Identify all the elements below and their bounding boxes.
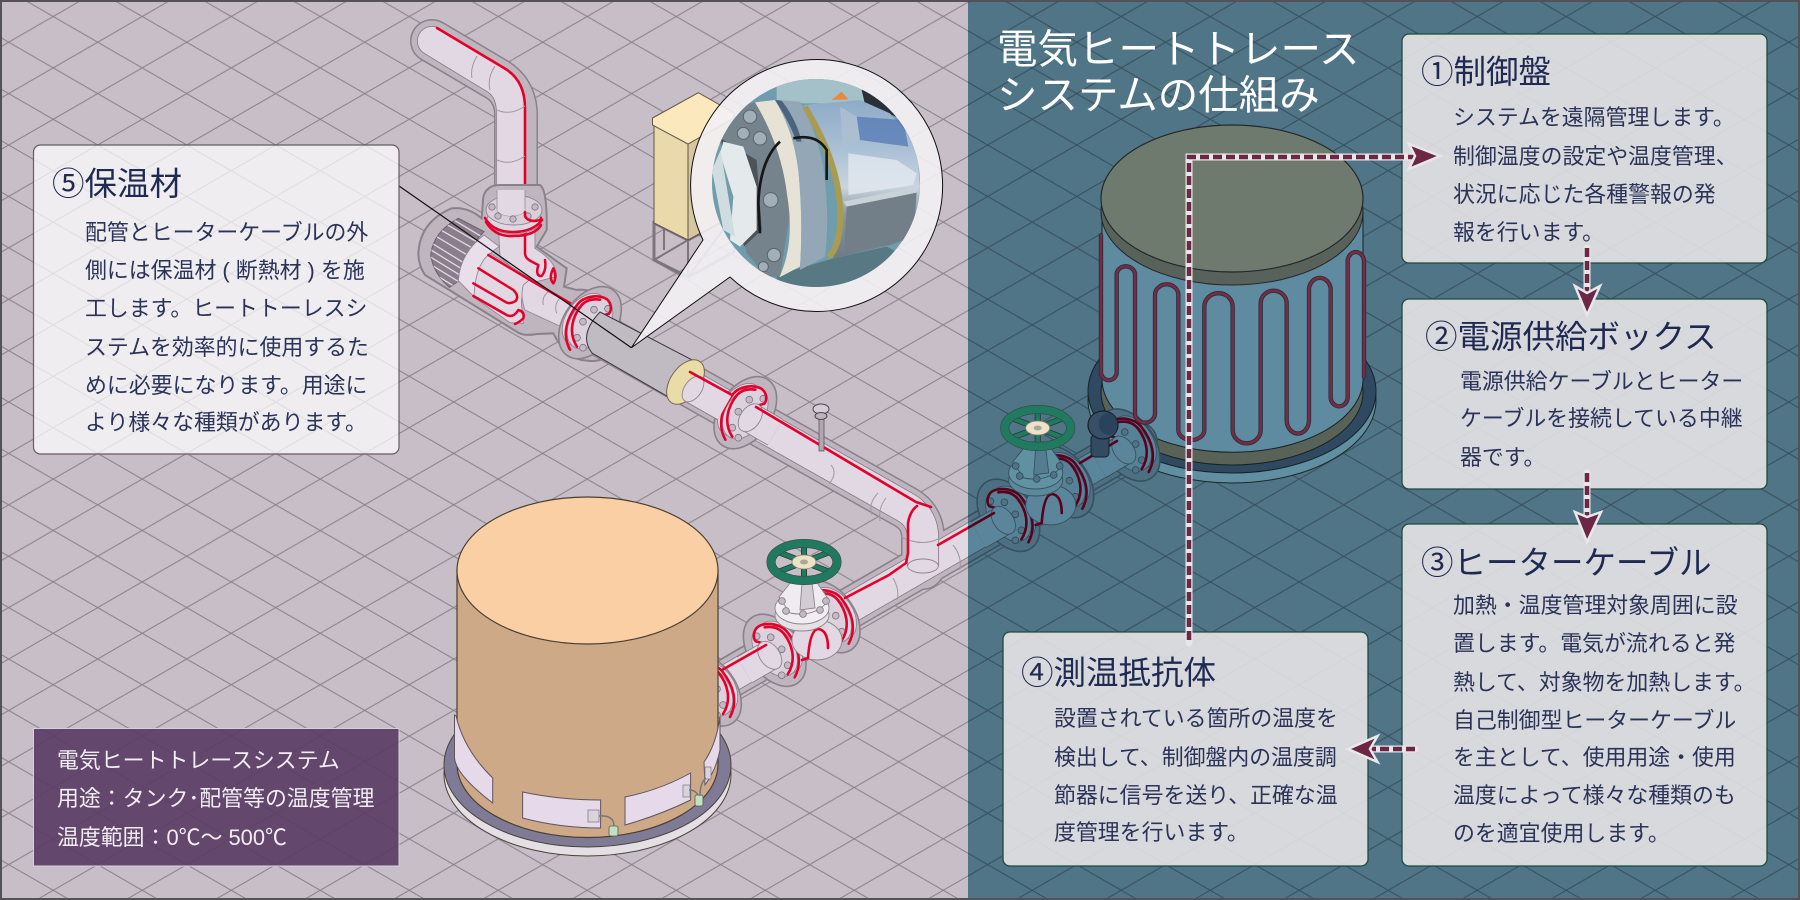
panel: 2 power supply box: 電源供給ケーブルとヒーター: [1460, 369, 1743, 394]
icon: temperature sensor on right pipe: [1088, 411, 1118, 457]
panel: 1 control panel: 状況に応じた各種警報の発: [1453, 182, 1716, 207]
panel: 2 power supply box: [1402, 299, 1767, 489]
heading: main title: 電気ヒートトレース: [997, 26, 1359, 72]
panel: 4 temperature sensor: ④測温抵抗体: [1021, 655, 1216, 691]
background: right teal multiply layer: [968, 0, 1800, 900]
panel: 5 insulation material: より様々な種類があります。: [85, 410, 367, 435]
panel: 5 insulation material: ⑤保温材: [52, 166, 182, 202]
illustration: insulated storage tank in the foreground: [444, 497, 731, 856]
panel: 4 temperature sensor: [1003, 632, 1368, 866]
panel: 4 temperature sensor: 検出して、制御盤内の温度調: [1054, 745, 1337, 770]
arrow: heater cable to sensor: [1348, 736, 1415, 762]
panel: 2 power supply box: ②電源供給ボックス: [1425, 319, 1717, 355]
panel: 1 control panel: システムを遠隔管理します。: [1453, 105, 1735, 130]
illustration: heater cable serpentine on right tank: [1101, 235, 1364, 443]
connector boxes: [588, 767, 711, 836]
insulation band panels: [454, 715, 720, 828]
panel: 3 heater cable: ③ヒーターケーブル: [1421, 545, 1712, 581]
panel: 3 heater cable: 加熱・温度管理対象周囲に設: [1453, 593, 1738, 618]
illustration: pipe flanges with heater cable: [546, 275, 1173, 738]
panel: 1 control panel: [1402, 34, 1767, 263]
panel: 3 heater cable: 熱して、対象物を加熱します。: [1453, 670, 1756, 695]
panel: 5 insulation material: 工します。ヒートトーレスシ: [85, 296, 367, 321]
panel: 5 insulation material: [34, 145, 399, 454]
panel: 1 control panel: ①制御盤: [1421, 54, 1551, 90]
illustration: right side storage tank: [1088, 212, 1376, 483]
panel: 5 insulation material: ステムを効率的に使用するた: [85, 335, 369, 360]
arrow: control panel to power box: [1575, 248, 1600, 315]
panel: 1 control panel: 報を行います。: [1453, 220, 1604, 245]
panel: usage summary: [34, 728, 399, 866]
panel: 5 insulation material: めに必要になります。用途に: [85, 373, 367, 398]
panel: 3 heater cable: 温度によって様々な種類のも: [1453, 783, 1736, 808]
illustration: main pipe run and lower pipe: [600, 335, 1137, 695]
heading: main title: [997, 26, 1359, 118]
panel: 4 temperature sensor: 度管理を行います。: [1054, 820, 1249, 845]
panel: 5 insulation material: 配管とヒーターケーブルの外: [85, 220, 368, 245]
panel: usage summary: 温度範囲：0℃～ 500℃: [57, 825, 287, 850]
panel: 3 heater cable: [1402, 524, 1767, 866]
illustration: gate valves on lower pipe: [771, 442, 1076, 660]
panel: 2 power supply box: ケーブルを接続している中継: [1460, 406, 1743, 431]
icon: temperature sensor on main pipe: [813, 404, 829, 451]
illustration: control panel cabinet on stand: [652, 93, 734, 277]
panel: 3 heater cable: 置します。電気が流れると発: [1453, 631, 1735, 656]
panel: usage summary: 電気ヒートトレースシステム: [57, 748, 340, 773]
panel: 3 heater cable: 自己制御型ヒーターケーブル: [1453, 708, 1736, 733]
illustration: heater cable along pipes: [690, 372, 1117, 670]
illustration: insulated pipe section and end cap: [587, 312, 725, 411]
panel: 5 insulation material: 側には保温材 ( 断熱材 ) を施: [85, 258, 365, 283]
illustration: upper flange on vertical pipe: [485, 190, 542, 236]
panel: 2 power supply box: 器です。: [1460, 445, 1545, 470]
panel: 3 heater cable: のを適宜使用します。: [1453, 821, 1670, 846]
callout: magnifier bubble with site photo: [631, 59, 943, 348]
leader line from insulation panel to pipe: [399, 186, 631, 348]
illustration: upper vertical pipe with elbow: [432, 28, 525, 220]
icon: handwheel of right valve: [1005, 408, 1071, 448]
panel: 4 temperature sensor: 設置されている箇所の温度を: [1054, 706, 1338, 731]
arrow: sensor to control panel: [1189, 144, 1440, 643]
illustration: right tank cover: [1101, 125, 1363, 285]
photo: insulated flange detail: [712, 79, 920, 287]
panel: 4 temperature sensor: 節器に信号を送り、正確な温: [1054, 783, 1338, 808]
panel: usage summary: 用途：タンク･配管等の温度管理: [57, 786, 375, 811]
illustration: pump-like cylinder assembly with tee and heater cable: [418, 185, 621, 361]
arrow: power box to heater cable: [1575, 473, 1601, 542]
panel: 3 heater cable: を主として、使用用途・使用: [1453, 745, 1736, 770]
panel: 1 control panel: 制御温度の設定や温度管理、: [1453, 144, 1738, 169]
heading: main title: システムの仕組み: [997, 72, 1320, 118]
